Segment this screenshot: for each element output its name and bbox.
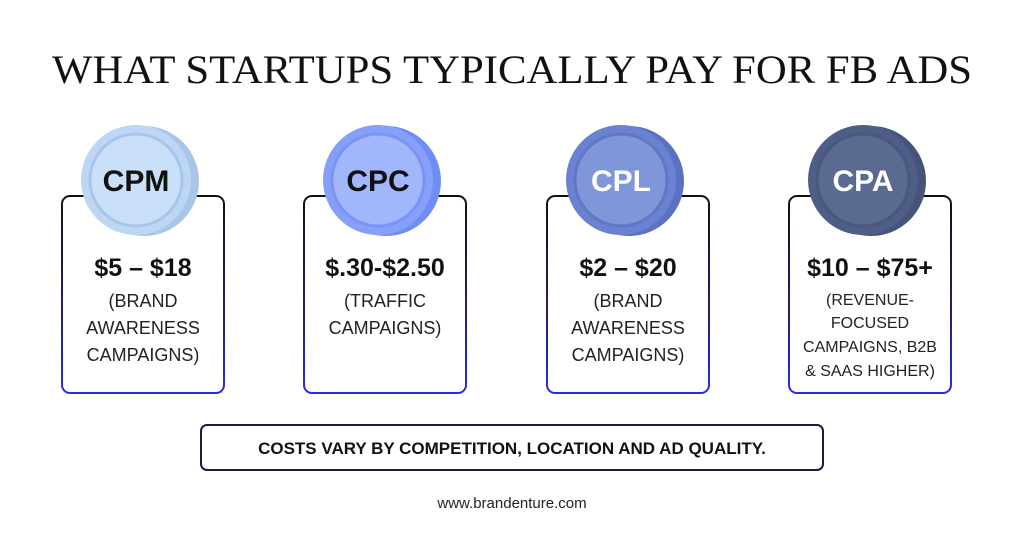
- icon: CPA coin: [808, 125, 926, 236]
- card: CPL: (BRAND: [593, 291, 663, 311]
- icon: CPM coin: CPM: [103, 165, 169, 198]
- card: CPC: $.30-$2.50: [325, 254, 445, 282]
- card: CPL: CAMPAIGNS): [572, 345, 684, 365]
- card: CPM: [62, 125, 224, 393]
- card: CPA: $10 – $75+: [807, 254, 933, 282]
- card: CPL: $2 – $20: [579, 254, 677, 282]
- card: CPC: [304, 125, 466, 393]
- card: CPA: [789, 125, 951, 393]
- card: CPM: (BRAND: [108, 291, 178, 311]
- icon: CPM coin: [81, 125, 199, 236]
- card: CPC: (TRAFFIC: [344, 291, 426, 311]
- footer url: www.brandenture.com: [436, 495, 587, 512]
- card: CPA: FOCUSED: [831, 315, 909, 332]
- icon: CPA coin: CPA: [832, 165, 894, 198]
- card: CPC: CAMPAIGNS): [329, 318, 441, 338]
- card: CPM: $5 – $18: [94, 254, 192, 282]
- card: CPL: [547, 125, 709, 393]
- callout banner: COSTS VARY BY COMPETITION, LOCATION AND AD QUALITY.: [258, 439, 766, 458]
- card: CPA: & SAAS HIGHER): [805, 363, 935, 380]
- card: CPL: AWARENESS: [571, 318, 685, 338]
- icon: CPC coin: CPC: [346, 165, 410, 198]
- icon: CPL coin: [566, 125, 684, 236]
- card: CPA: CAMPAIGNS, B2B: [803, 339, 937, 356]
- card: CPA: (REVENUE-: [826, 292, 914, 309]
- icon: CPL coin: CPL: [591, 165, 651, 198]
- title: WHAT STARTUPS TYPICALLY PAY FOR FB ADS: [52, 47, 972, 92]
- icon: CPC coin: [323, 125, 441, 236]
- card: CPM: CAMPAIGNS): [87, 345, 199, 365]
- card: CPM: AWARENESS: [86, 318, 200, 338]
- callout banner: [201, 425, 823, 470]
